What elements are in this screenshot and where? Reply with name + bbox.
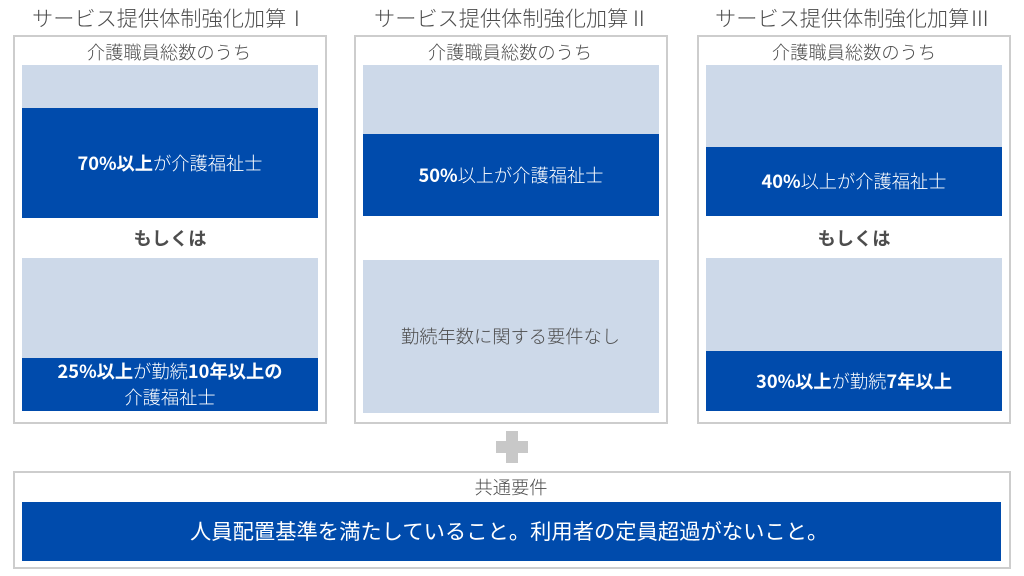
title: tier I: サービス提供体制強化加算Ⅰ [32,2,307,33]
bar: 70 percent care workers: 70%以上が介護福祉士 [77,150,263,176]
bar: 30 percent long tenure [706,258,1002,411]
bar: 50 percent care workers [363,65,659,216]
bar: staffing requirement: 人員配置基準を満たしていること。利用者の定員超過がないこと。 [190,515,828,546]
panel: tier III [697,35,1011,424]
caption: tier III staff total: 介護職員総数のうち [772,39,936,65]
bar: 25 percent long tenure: 介護福祉士 [124,384,216,410]
bar: 25 percent long tenure [22,258,318,411]
panel: tier I [13,35,327,424]
heading: common requirements: 共通要件 [474,474,548,500]
icon: plus [496,431,528,463]
bar: 25 percent long tenure: 25%以上が勤続10年以上の [58,358,282,384]
label: or: もしくは [134,225,206,251]
bar: 70 percent care workers [22,65,318,218]
panel: common requirements [13,471,1011,569]
bar: 40 percent care workers: 40%以上が介護福祉士 [761,168,947,194]
label: or: もしくは [818,225,890,251]
caption: tier II staff total: 介護職員総数のうち [428,39,592,65]
bar: 30 percent long tenure: 30%以上が勤続7年以上 [756,368,952,394]
box: no tenure requirement [362,260,658,413]
title: tier III: サービス提供体制強化加算Ⅲ [715,2,990,33]
caption: tier I staff total: 介護職員総数のうち [87,39,251,65]
bar: 50 percent care workers: 50%以上が介護福祉士 [418,162,604,188]
bar: 40 percent care workers [706,65,1002,216]
title: tier II: サービス提供体制強化加算Ⅱ [374,2,649,33]
panel: tier II [354,35,668,424]
bar: staffing requirement [22,502,1001,561]
box: no tenure requirement: 勤続年数に関する要件なし [401,323,620,349]
